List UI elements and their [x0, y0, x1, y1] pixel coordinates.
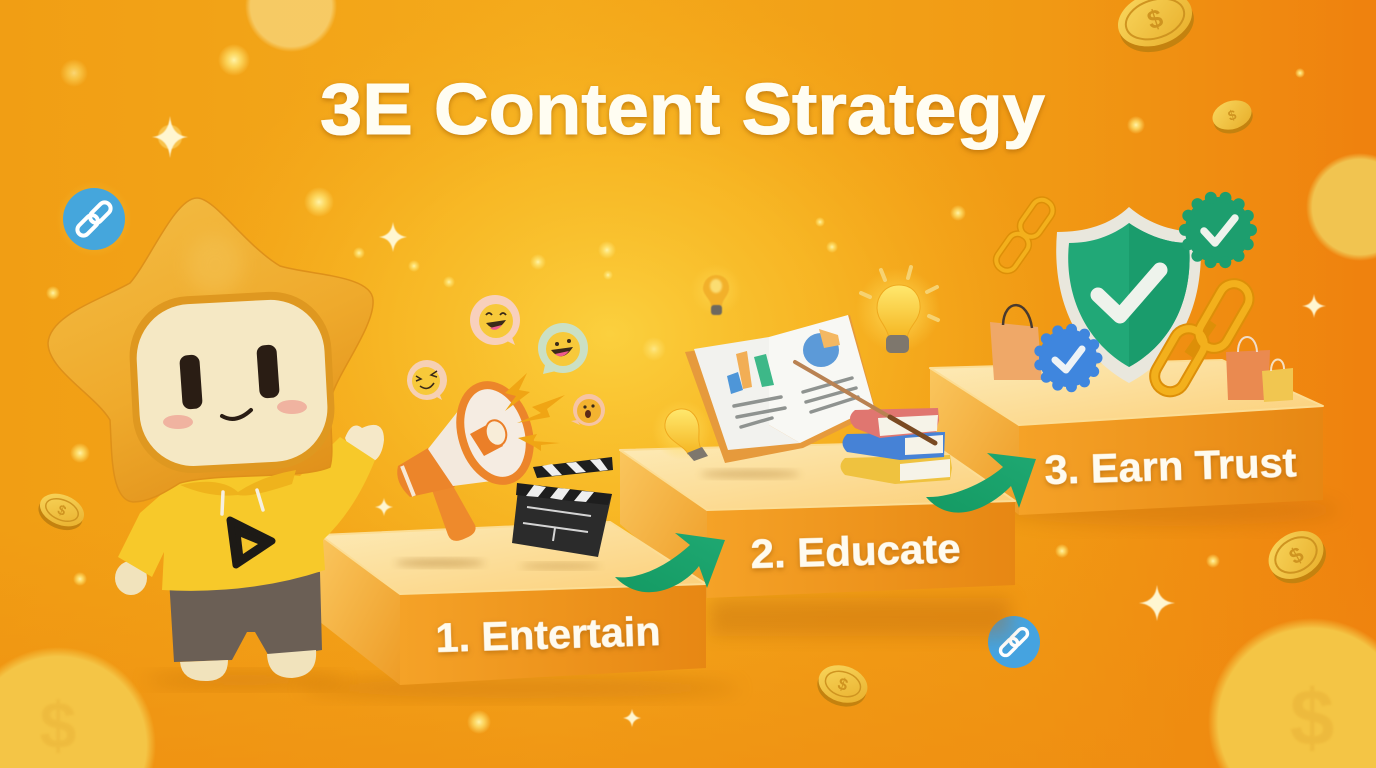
icon: large gold chain [1149, 278, 1254, 397]
shorts [169, 572, 322, 662]
icon: smiling emoji bubble [538, 323, 588, 374]
arrow: step 2 to 3 [926, 453, 1036, 513]
icon: shield with check [1056, 207, 1201, 383]
icon: lightbulb small top [690, 264, 742, 316]
icon: lightbulb left of book [652, 400, 712, 461]
coin: top right [1111, 0, 1201, 61]
cheeks [163, 400, 307, 429]
sparkles [152, 116, 1326, 727]
coin: upper right small: $ [1226, 106, 1238, 124]
star hood highlight [187, 235, 243, 295]
coin: left [34, 487, 89, 536]
icon: shopping bags right [1226, 337, 1293, 402]
coin: right lower [1260, 521, 1335, 593]
coin: right lower: $ [1285, 542, 1308, 569]
icon: play logo on hoodie [230, 520, 272, 565]
icon: megaphone [395, 373, 565, 567]
icon: small chain top [992, 196, 1056, 275]
bar chart [727, 351, 774, 394]
mouth [222, 410, 251, 419]
label: 2. Educate: 2. Educate [750, 525, 961, 577]
character: star mascot [48, 198, 384, 687]
eyes [179, 344, 280, 410]
coin: top right: $ [1143, 2, 1167, 36]
icon: surprised emoji bubble [571, 394, 605, 426]
hoodie body with arms [118, 437, 375, 591]
step 1 platform: entertain [300, 522, 740, 698]
hood collar [180, 470, 296, 496]
text lines on book [734, 378, 858, 427]
icon: lightbulb large [856, 267, 940, 353]
left hand [115, 561, 147, 595]
icon: pointer stick [795, 362, 935, 443]
title: 3E Content Strategy [320, 70, 1045, 150]
icon: clapperboard [512, 457, 613, 569]
icon: stack of books [840, 408, 952, 484]
step 3 platform: earn trust [930, 360, 1340, 526]
coin: left: $ [55, 501, 69, 519]
drawstrings [222, 490, 263, 514]
icon: shopping bag left [990, 305, 1042, 380]
face [127, 289, 338, 476]
label: 3. Earn Trust: 3. Earn Trust [1044, 439, 1297, 493]
character shadow [145, 673, 345, 687]
pie chart [803, 329, 840, 367]
icon: open book with charts [685, 315, 876, 478]
coin: upper right small [1209, 96, 1257, 138]
label: 1. Entertain: 1. Entertain [435, 608, 661, 661]
feet [180, 650, 316, 681]
icon: link badge lower [988, 616, 1040, 668]
icon: green verified badge [1185, 197, 1251, 263]
blurred foreground coins: $ [40, 688, 76, 762]
icon: laughing emoji bubble [470, 295, 520, 345]
step 2 platform: educate [620, 442, 1015, 636]
raised hand [345, 425, 384, 462]
arrow: step 1 to 2 [615, 533, 725, 592]
lightning bolts [505, 373, 565, 451]
coin: bottom centre: $ [835, 674, 851, 695]
coin: bottom centre [812, 659, 872, 713]
star hood [48, 198, 373, 502]
icon: link badge upper left [56, 181, 132, 257]
icon: blue verified badge [1039, 329, 1097, 387]
blurred foreground coins: $ [1290, 673, 1334, 762]
icon: winking emoji bubble [407, 360, 447, 400]
